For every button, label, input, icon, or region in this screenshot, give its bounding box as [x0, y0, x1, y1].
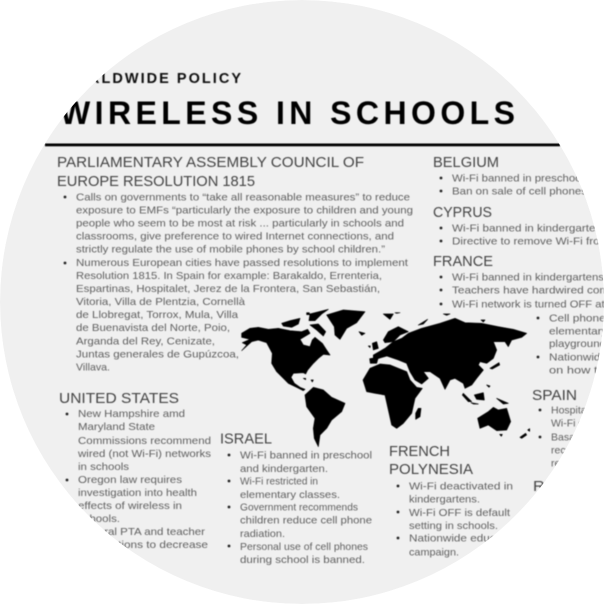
United States bullets: associations to decrease — [78, 539, 208, 551]
section bullets: Juntas generales de Gupúzcoa, — [76, 348, 239, 360]
Belgium bullets: Wi-Fi banned in preschool — [452, 172, 584, 184]
Israel bullets: elementary classes. — [240, 489, 340, 501]
section: Cyprus — [433, 206, 598, 246]
section bullets: people who seem to be most at risk ... particularly in schools and — [76, 218, 404, 230]
Japan — [490, 363, 500, 369]
Americas and Greenland — [242, 309, 365, 447]
Madagascar — [416, 408, 421, 419]
section bullets: Espartinas, Hospitalet, Jerez de la Frontera, San Sebastián, — [76, 283, 380, 295]
United States bullets: schools. — [78, 513, 120, 525]
section bullets: Resolution 1815. In Spain for example: Barakaldo, Errenteria, — [76, 270, 382, 282]
section bullets: strictly regulate the use of mobile phones by school children.” — [76, 244, 386, 256]
Spain bullets: reduce — [551, 458, 583, 470]
Israel bullets: radiation. — [240, 528, 285, 540]
French Polynesia bullets: Wi-Fi OFF is default — [409, 507, 510, 519]
Spain heading: SPAIN — [532, 388, 577, 404]
Greenland — [327, 310, 365, 339]
United States bullets — [66, 408, 211, 551]
United States bullets: investigation into health — [78, 487, 197, 499]
Cyprus bullets: Wi-Fi banned in kindergarten — [452, 222, 602, 234]
United States bullets: effects of wireless in — [78, 500, 182, 512]
section heading — [58, 156, 364, 187]
French Polynesia bullets: campaign. — [409, 546, 459, 558]
Israel bullets: Government recommends — [240, 502, 358, 514]
section: Israel — [220, 432, 372, 566]
eyebrow heading: WORLDWIDE POLICY — [60, 71, 241, 87]
French Polynesia bullets: setting in schools. — [409, 520, 498, 532]
France bullets — [440, 272, 604, 376]
Israel bullets: during school is banned. — [240, 554, 365, 566]
section bullets: exposure to EMFs “particularly the exposure to children and young — [76, 204, 413, 216]
world map — [242, 309, 530, 447]
French Polynesia bullets: kindergartens. — [409, 494, 480, 506]
section: Belgium — [433, 155, 587, 198]
Spain bullets: Wi-Fi off — [551, 418, 590, 430]
section bullets: de Llobregat, Torrox, Mula, Villa — [76, 309, 238, 321]
Spain bullets: Basauri — [551, 432, 587, 444]
section bullets: Vitoria, Villa de Plentzia, Cornellà — [76, 296, 245, 308]
title rule — [45, 144, 560, 146]
section bullets — [64, 192, 413, 374]
section bullets: Villava. — [76, 362, 110, 374]
British Isles — [368, 342, 378, 350]
United States bullets: New Hampshire amd — [78, 408, 185, 420]
section bullets: Numerous European cities have passed resolutions to implement — [76, 257, 408, 269]
section bullets: Arganda del Rey, Cenizate, — [76, 336, 215, 348]
section: United States — [59, 391, 211, 551]
United States bullets: in schools — [78, 461, 129, 473]
Caribbean islands — [303, 378, 313, 382]
French Polynesia heading: FRENCH — [389, 444, 450, 460]
Scandinavia — [383, 327, 408, 343]
Cyprus bullets — [438, 224, 598, 246]
title: WIRELESS IN SCHOOLS — [60, 95, 515, 131]
section heading: EUROPE RESOLUTION 1815 — [57, 174, 255, 190]
French Polynesia bullets: Nationwide education — [409, 532, 521, 544]
Belgium bullets — [440, 172, 587, 198]
Eurasia, Africa and Oceania — [363, 313, 530, 438]
United States bullets: Maryland State — [78, 421, 155, 433]
French Polynesia heading — [390, 445, 474, 475]
Southeast Asia islands — [462, 385, 508, 404]
French Polynesia heading: POLYNESIA — [389, 462, 473, 478]
French Polynesia bullets — [397, 480, 521, 558]
United States bullets: Oregon law requires — [78, 474, 182, 486]
Cyprus heading: CYPRUS — [433, 205, 492, 221]
section bullets: de Buenavista del Norte, Poio, — [76, 322, 230, 334]
United States heading: UNITED STATES — [59, 391, 179, 407]
United States bullets: wired (not Wi-Fi) networks — [77, 448, 211, 460]
section bullets: Calls on governments to “take all reasonable measures” to reduce — [76, 192, 410, 204]
Spain bullets: Hospitalet — [551, 404, 598, 416]
North America — [242, 327, 330, 391]
Israel bullets: and kindergarten. — [240, 463, 328, 475]
Spain bullets — [538, 406, 585, 467]
section: Russia heading: RUSSIA — [533, 479, 593, 495]
content layer — [45, 71, 604, 566]
section: French Polynesia — [389, 444, 521, 558]
Israel bullets: Wi-Fi banned in preschool — [240, 450, 372, 462]
section: Spain — [532, 389, 585, 467]
Iceland — [359, 332, 365, 335]
Australia — [478, 407, 511, 431]
section heading: PARLIAMENTARY ASSEMBLY COUNCIL OF — [57, 155, 364, 171]
United States bullets: Several PTA and teacher — [78, 526, 206, 538]
French Polynesia bullets: Wi-Fi deactivated in — [409, 480, 513, 492]
Israel bullets — [228, 450, 372, 566]
France bullets: Wi-Fi banned in kindergartens — [452, 272, 604, 284]
Belgium bullets: Ban on sale of cell phones — [452, 186, 587, 198]
Belgium heading: BELGIUM — [433, 155, 499, 171]
Israel bullets: Personal use of cell phones — [240, 541, 368, 553]
section bullets: classrooms, give preference to wired Internet connections, and — [76, 230, 394, 242]
Eurasia — [373, 318, 527, 389]
United States bullets: Commissions recommend — [78, 435, 211, 447]
South America — [305, 387, 345, 447]
Africa — [363, 364, 422, 428]
Israel bullets: Wi-Fi restricted in — [240, 476, 318, 488]
Arctic islands — [383, 313, 485, 325]
Iberia — [370, 357, 378, 363]
section: France — [433, 254, 604, 376]
Israel bullets: children reduce cell phone — [240, 514, 372, 526]
section: Parliamentary Assembly — [57, 155, 413, 374]
Arctic islands — [282, 309, 328, 336]
France heading: FRANCE — [433, 254, 493, 270]
Israel heading: ISRAEL — [220, 432, 272, 448]
New Zealand and Tasmania — [500, 429, 530, 438]
